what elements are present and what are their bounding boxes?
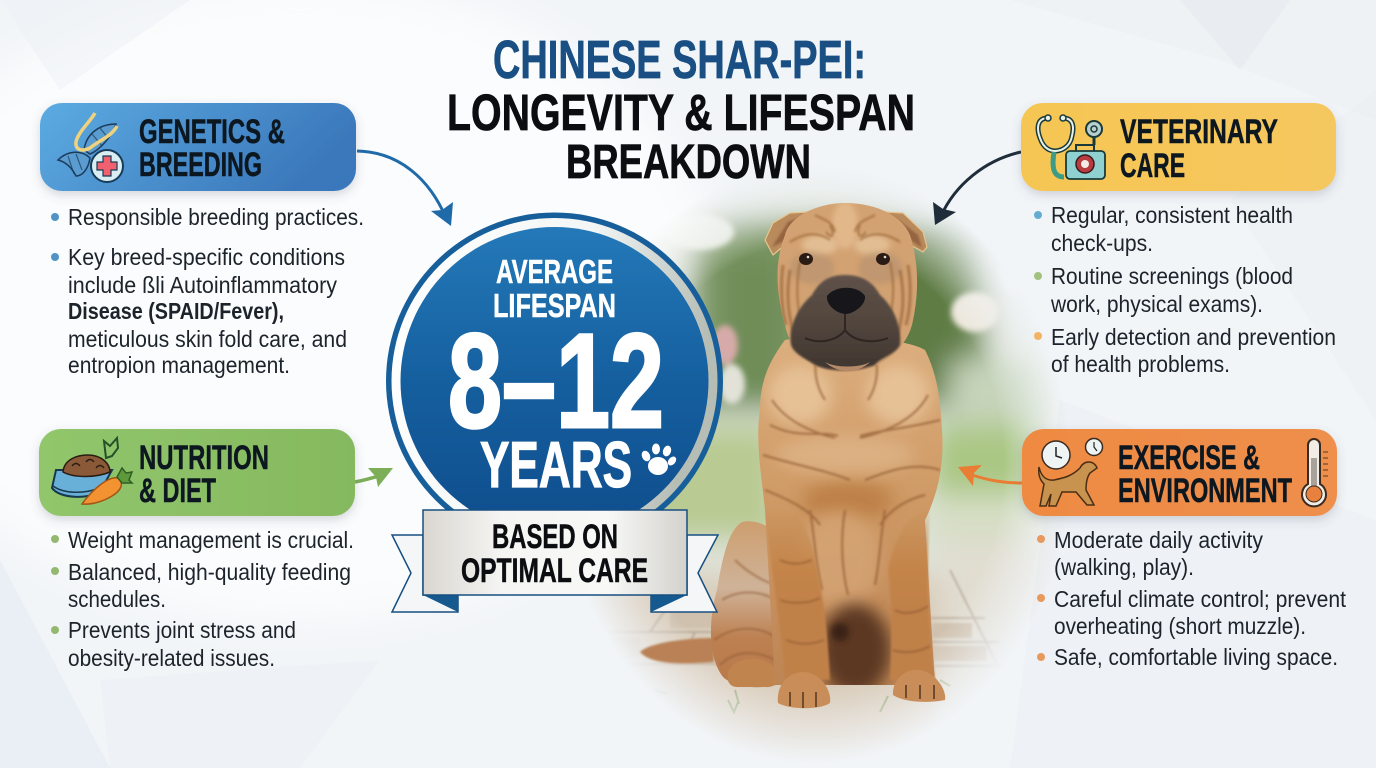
bullets: exercise: Careful climate control; prevent bbox=[1054, 586, 1347, 612]
bullets: genetics: meticulous skin fold care, and bbox=[68, 326, 347, 352]
header: exercise bbox=[1022, 429, 1337, 516]
heading: exercise: ENVIRONMENT bbox=[1118, 472, 1292, 510]
icon: food bowl and carrot bbox=[52, 438, 132, 504]
bullets: nutrition: schedules. bbox=[68, 586, 166, 612]
banner text: OPTIMAL CARE bbox=[461, 552, 648, 590]
panel: nutrition and diet bbox=[39, 429, 355, 671]
medallion bbox=[386, 212, 723, 550]
garden photo backdrop bbox=[596, 186, 1056, 752]
title: CHINESE SHAR-PEI: bbox=[493, 30, 866, 90]
haunch bbox=[711, 521, 800, 687]
ribbon folds bbox=[423, 595, 687, 612]
lifespan label: AVERAGE bbox=[496, 253, 613, 290]
lifespan label: LIFESPAN bbox=[493, 287, 616, 324]
badge: average lifespan bbox=[386, 212, 723, 612]
haunch folds bbox=[714, 560, 780, 665]
icon: dna and medical cross bbox=[58, 113, 123, 182]
heading: nutrition: NUTRITION bbox=[139, 439, 269, 477]
banner bbox=[423, 510, 687, 595]
muzzle bbox=[791, 275, 900, 370]
banner text: BASED ON bbox=[492, 518, 618, 556]
heading: exercise bbox=[1118, 439, 1292, 510]
panel: genetics and breeding bbox=[40, 103, 364, 378]
header: veterinary bbox=[1021, 103, 1336, 191]
title: BREAKDOWN bbox=[566, 136, 811, 189]
bullets: veterinary: Regular, consistent health bbox=[1051, 202, 1293, 228]
bullets: veterinary: Routine screenings (blood bbox=[1051, 263, 1293, 289]
bullets: nutrition: obesity-related issues. bbox=[68, 645, 275, 671]
rear paw bbox=[728, 659, 778, 687]
bullets: genetics: entropion management. bbox=[68, 352, 290, 378]
front paws bbox=[778, 670, 945, 708]
bullets: genetics bbox=[51, 204, 364, 378]
panel: exercise and environment bbox=[1022, 429, 1347, 670]
nose bbox=[827, 288, 865, 314]
arrow: exercise to dog bbox=[958, 465, 1022, 486]
heading: nutrition: & DIET bbox=[139, 472, 216, 510]
ribbon tails bbox=[392, 535, 718, 612]
bullets: exercise: overheating (short muzzle). bbox=[1054, 613, 1306, 639]
tail bbox=[640, 638, 714, 663]
lifespan label: 8–12 bbox=[448, 307, 664, 456]
bullets: nutrition: Prevents joint stress and bbox=[68, 617, 296, 643]
eyes bbox=[799, 253, 890, 265]
arrow: veterinary to dog bbox=[933, 152, 1021, 225]
bullets: veterinary bbox=[1034, 202, 1336, 377]
heading: veterinary: VETERINARY bbox=[1120, 113, 1278, 151]
arrow: nutrition to badge bbox=[355, 468, 393, 487]
heading: veterinary bbox=[1120, 113, 1278, 185]
heading: nutrition bbox=[139, 439, 269, 510]
header: nutrition bbox=[39, 429, 355, 516]
heading: genetics: GENETICS & bbox=[139, 113, 285, 151]
arrow: genetics to badge bbox=[357, 151, 453, 226]
chin bbox=[825, 362, 870, 371]
bullets: genetics: Key breed-specific conditions bbox=[68, 244, 345, 270]
icon: clocks and walking dog bbox=[1039, 438, 1102, 506]
bullets: genetics: Disease (SPAID/Fever), bbox=[68, 298, 284, 324]
torso shading bbox=[763, 345, 940, 696]
bullets: nutrition: Balanced, high-quality feeding bbox=[68, 559, 351, 585]
heading: genetics bbox=[139, 113, 285, 184]
bullets: veterinary: work, physical exams). bbox=[1050, 291, 1263, 317]
bullets: genetics: include ßli Autoinflammatory bbox=[68, 272, 337, 298]
panel: veterinary care bbox=[1021, 103, 1336, 377]
bullets: veterinary: Early detection and prevention bbox=[1051, 324, 1336, 350]
ears bbox=[765, 212, 927, 255]
bullets: veterinary: of health problems. bbox=[1051, 351, 1230, 377]
heading: exercise: EXERCISE & bbox=[1118, 439, 1260, 477]
lifespan label: YEARS bbox=[480, 428, 632, 501]
bullets: exercise: (walking, play). bbox=[1054, 554, 1194, 580]
lifespan label bbox=[448, 253, 664, 501]
bullets: exercise bbox=[1037, 527, 1347, 670]
front legs bbox=[765, 509, 935, 680]
bullets: nutrition: Weight management is crucial. bbox=[68, 527, 354, 553]
icon: paw print bbox=[640, 444, 678, 475]
head bbox=[778, 203, 917, 372]
header: genetics bbox=[40, 103, 356, 191]
bullets: nutrition bbox=[51, 527, 354, 671]
title bbox=[447, 30, 915, 189]
heading: genetics: BREEDING bbox=[139, 146, 262, 184]
bullets: veterinary: check-ups. bbox=[1051, 230, 1153, 256]
title: LONGEVITY & LIFESPAN bbox=[447, 84, 915, 141]
bullets: genetics: Responsible breeding practices. bbox=[68, 204, 364, 230]
heading: veterinary: CARE bbox=[1120, 147, 1185, 185]
face folds bbox=[782, 201, 910, 340]
icon: stethoscope and medical case bbox=[1038, 115, 1105, 179]
dog: shar-pei illustration bbox=[640, 201, 945, 708]
banner text bbox=[461, 518, 648, 590]
torso bbox=[758, 337, 943, 685]
bullets: exercise: Moderate daily activity bbox=[1054, 527, 1263, 553]
bullets: exercise: Safe, comfortable living space. bbox=[1054, 644, 1338, 670]
mouth bbox=[805, 314, 888, 341]
icon: thermometer bbox=[1302, 439, 1328, 506]
